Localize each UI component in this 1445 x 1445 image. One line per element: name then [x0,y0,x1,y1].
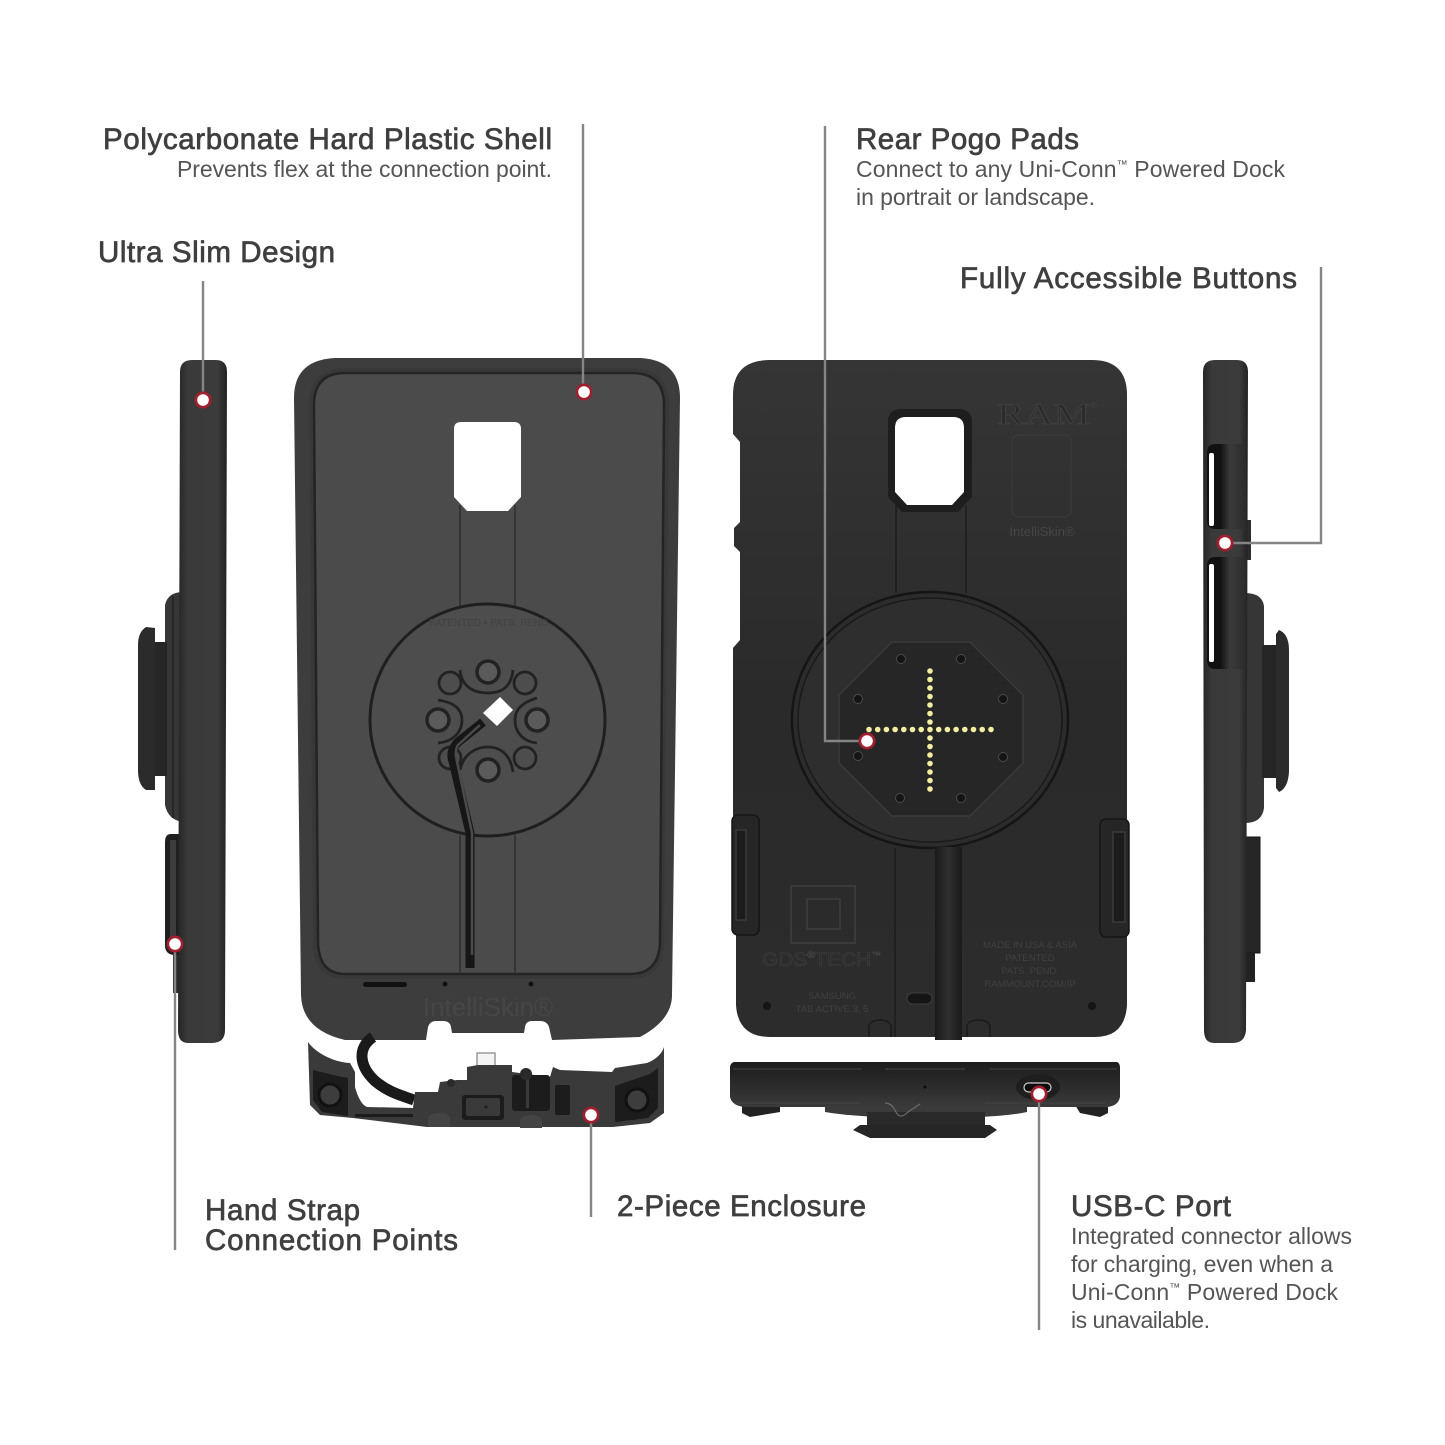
leader line: ultra slim [202,281,204,400]
text: pogo line one: Connect to any Uni-Conn [856,156,1117,182]
internal cable [452,722,483,968]
callout marker: pogo [858,732,876,750]
text: pogo line one: ™ [1117,159,1128,171]
strip and stem lines [895,505,966,1037]
embossed GDS logo [791,886,855,943]
heading: hand strap line one: Hand Strap [205,1194,360,1227]
text: polycarbonate description: Prevents flex at the connection point. [177,156,552,182]
leader line: hand strap [174,944,176,1250]
text: pogo line one: Powered Dock [1128,156,1286,182]
lower button slit [1209,564,1214,662]
leader line: enclosure [590,1115,592,1217]
stem [935,847,962,1040]
strap clips [732,815,1129,937]
embossed IntelliSkin mark [1012,435,1071,517]
pogo pads [866,668,994,792]
embossed legal text: MADE IN USA & ASIA [983,940,1078,951]
edge inner outline [733,1069,1117,1103]
mount ring [792,592,1068,848]
device: right side view [1203,360,1289,1043]
camera window [454,422,521,511]
feet and puck [742,1100,1108,1117]
rear shell [733,360,1127,1037]
embossed GDS TECH: TECH [814,950,871,971]
text: usb-c line four: is unavailable. [1071,1307,1210,1333]
leader line: pogo pads [825,126,866,741]
heading: buttons: Fully Accessible Buttons [960,262,1297,295]
case cavity [314,373,664,974]
case shell [294,358,680,1040]
edge body [730,1062,1120,1107]
mount circle [370,604,605,836]
device: front case interior [294,358,680,1040]
device: left side view [138,360,227,1043]
device: bottom connector piece [308,1037,664,1128]
embossed legal text: PATS. PEND. [1001,966,1059,977]
callout marker: usb-c [1030,1086,1048,1102]
embossed model text: SAMSUNG [808,991,856,1002]
embossed model line two: TAB ACTIVE 3, 5 [796,1004,868,1015]
heading: ultra slim: Ultra Slim Design [98,236,335,269]
callout marker: buttons [1216,534,1234,552]
circle embossed text: PATENTED • PATS. PEND. [429,618,551,629]
mount flower [427,661,548,781]
connector cable [362,1037,414,1100]
callout marker: enclosure [582,1106,600,1124]
device: rear case [732,360,1129,1040]
leader line: usb-c [1038,1094,1040,1330]
bottom slot and holes [363,982,407,987]
embossed GDS TECH: ® [807,950,815,960]
embossed GDS TECH: ™ [871,950,881,960]
embossed IntelliSkin text: IntelliSkin® [1009,524,1075,539]
usb-c plug [477,1053,495,1072]
plate screws [854,654,1008,802]
heading: pogo pads: Rear Pogo Pads [856,123,1079,156]
text: usb-c line two: for charging, even when a [1071,1251,1333,1277]
device: bottom edge view [730,1062,1120,1138]
lower button recess [1207,557,1245,669]
text: usb-c line one: Integrated connector allows [1071,1223,1352,1249]
embossed legal text: RAMMOUNT.COM/IP [984,979,1076,990]
embossed GDS TECH: GDS [762,950,803,971]
connector body [308,1042,664,1127]
upper button slit [1209,453,1214,526]
leader line: buttons [1225,267,1321,543]
leader line: polycarbonate shell [582,124,584,392]
case rim line [309,368,669,979]
embossed legal text: PATENTED [1005,953,1055,964]
text: pogo line two: in portrait or landscape. [856,184,1095,210]
edge notch [885,1103,920,1116]
connector feet [428,1113,542,1128]
port outline [1024,1083,1051,1092]
camera window [888,409,972,512]
heading: enclosure: 2-Piece Enclosure [617,1190,866,1223]
callout marker: slim [194,392,212,408]
upper button recess [1207,444,1245,529]
octagon plate [839,642,1023,816]
callout marker: shell [576,384,592,400]
window diamond [483,697,513,726]
callout marker: strap [166,936,184,952]
heading: usb-c: USB-C Port [1071,1190,1231,1223]
bottom bumps [869,1020,990,1037]
text: usb-c line three: Powered Dock [1180,1279,1338,1305]
centre strip [460,505,515,974]
edge hole [924,1086,926,1088]
corner screws and latch [763,993,1096,1010]
heading: hand strap line two: Connection Points [205,1224,458,1257]
embossed IntelliSkin: IntelliSkin® [423,992,553,1022]
heading: polycarbonate shell: Polycarbonate Hard Plastic Shell [103,123,552,156]
embossed registered mark: ® [1090,400,1097,410]
text: usb-c line three: Uni-Conn [1071,1279,1169,1305]
text: usb-c line three: ™ [1169,1282,1180,1294]
embossed legal text [983,940,1078,990]
connector details [313,1068,658,1122]
usb-c port [1016,1074,1060,1100]
embossed RAM logo: RAM [997,398,1090,431]
